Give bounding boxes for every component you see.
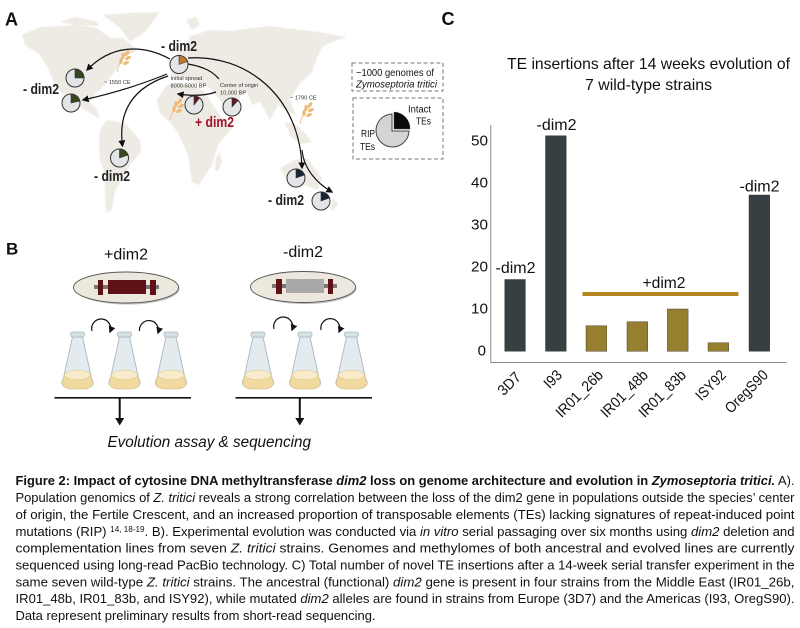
map label: initial spread: Initial spread — [170, 76, 202, 82]
annotation: 3D7 dim2: -dim2 — [496, 260, 536, 277]
label: plus dim2: +dim2 — [104, 246, 148, 264]
map label: center of origin: Center of origin — [220, 83, 258, 89]
legend: TE pie box — [353, 98, 443, 159]
map label: 1550 CE: ~ 1550 CE — [104, 80, 131, 86]
figure caption: of origin, the Fertile Crescent, and an increased proportion of transposable elements (TEs) lacking signatures of repeat-induced point — [16, 507, 795, 522]
x axis labels — [494, 367, 772, 421]
icon: wheat — [170, 97, 185, 120]
pie: Australia — [287, 169, 305, 187]
map label: initial spread: 8000-5000 BP — [170, 84, 207, 90]
curved transfer arrows — [92, 317, 340, 333]
icon: wheat — [117, 49, 132, 72]
figure caption: Population genomics of Z. tritici reveals a strong correlation between the loss of the dim2 gene in populations outside the species’ center — [16, 490, 795, 505]
y axis labels: 10 — [471, 300, 488, 318]
x axis labels: IR01_26b — [552, 367, 607, 421]
figure caption: . B). Experimental evolution was conducted via — [145, 524, 420, 539]
y axis labels: 30 — [471, 216, 488, 234]
bracket: minus dim2 — [236, 397, 372, 426]
y axis labels: 40 — [471, 174, 488, 192]
x axis labels: I93 — [540, 367, 566, 392]
plasmid: functional dim2 — [74, 272, 180, 304]
flasks: plus dim2 series — [62, 332, 187, 389]
arrow: to Africa — [178, 92, 216, 95]
figure caption — [16, 473, 795, 623]
annotation: I93 dim2: -dim2 — [536, 117, 576, 134]
figure caption: IR01_48b, IR01_83b, and ISY92), while mutated dim2 alleles are found in strains from Europe (3D7) and the Americas (I93, OregS90). — [16, 591, 795, 606]
icon: wheat — [300, 101, 315, 124]
figure caption: in vitro serial passaging over six months using dim2 deletion and — [420, 524, 793, 539]
map label: Oceania dim2: - dim2 — [268, 193, 304, 209]
x axis labels: 3D7 — [494, 369, 525, 399]
plasmid: deleted dim2 — [250, 272, 356, 304]
label: evolution assay: Evolution assay & sequencing — [108, 434, 311, 451]
panel: B evolution assay — [6, 240, 372, 451]
map label: South America dim2: - dim2 — [94, 169, 130, 185]
axes — [491, 125, 786, 362]
arrow: to Australia — [188, 58, 302, 168]
figure caption: same seven wild-type Z. tritici strains. The ancestral (functional) dim2 gene is present in four strains from the Middle East (IR01_26b, — [16, 574, 794, 590]
arrow: to South America — [122, 76, 168, 146]
pie: Africa — [185, 96, 203, 114]
legend: TE pie box: RIP — [361, 129, 375, 140]
arrow: to Central America — [83, 74, 167, 100]
heading: panel B: B — [6, 240, 18, 258]
heading: panel C: C — [442, 9, 454, 29]
legend: genomes box — [352, 63, 443, 91]
world map — [22, 12, 347, 213]
legend: TE pie box: TEs — [416, 116, 431, 128]
map label: 1790 CE: ~ 1790 CE — [290, 96, 317, 102]
panel: A world map with dim2 spread — [5, 10, 443, 213]
x axis labels: OregS90 — [722, 367, 772, 417]
x axis labels: ISY92 — [692, 367, 730, 404]
flasks: minus dim2 series — [242, 332, 367, 389]
annotation: plus dim2 group — [582, 275, 738, 296]
figure caption: sequenced using long-read PacBio technology. C) Total number of novel TE insertions after a 14-week serial transfer experiment in the — [16, 558, 794, 572]
pie: North America — [66, 69, 84, 87]
arrow: to New Zealand — [302, 150, 332, 192]
legend: TE pie box: Intact — [408, 104, 431, 116]
figure caption: Figure 2: Impact of cytosine DNA methyltransferase dim2 loss on genome architecture and evolution in Zymoseptoria tritici. A). — [16, 473, 794, 488]
panel: C bar chart — [442, 9, 791, 421]
chart title line 2: 7 wild-type strains — [585, 77, 712, 94]
x axis labels: IR01_83b — [635, 367, 690, 421]
arrow: to North America — [87, 49, 170, 70]
pie: initial spread — [170, 55, 188, 74]
figure caption: 14, 18-19 — [110, 525, 145, 534]
bracket: plus dim2 — [54, 397, 191, 426]
label: minus dim2: -dim2 — [283, 244, 323, 261]
bars — [505, 136, 770, 351]
heading: panel A: A — [5, 10, 18, 30]
pie: center of origin — [223, 98, 241, 116]
map label: plus dim2: + dim2 — [195, 115, 234, 131]
y axis labels — [471, 132, 488, 360]
chart title: TE insertions after 14 weeks evolution of — [507, 56, 791, 73]
figure caption: complementation lines from seven Z. tritici strains. Genomes and methylomes of both ancestral and evolved lines are currently — [16, 540, 795, 556]
pie: Central America — [62, 94, 80, 112]
pie: New Zealand — [312, 192, 330, 210]
y axis labels: 0 — [478, 342, 486, 360]
x axis labels: IR01_48b — [597, 367, 652, 421]
figure caption: mutations (RIP) — [16, 524, 105, 539]
map label: top dim2: - dim2 — [161, 39, 197, 55]
annotation: OregS90 dim2: -dim2 — [740, 178, 780, 196]
map label: North America dim2: - dim2 — [23, 82, 59, 98]
legend: genomes box: Zymoseptoria tritici — [355, 78, 438, 90]
arrow: fertile crescent link — [188, 64, 219, 79]
y axis labels: 50 — [471, 132, 488, 150]
y axis labels: 20 — [471, 258, 488, 276]
legend: TE pie box: TEs — [360, 142, 375, 153]
annotation: plus dim2 group: +dim2 — [642, 275, 686, 292]
legend: genomes box: ~1000 genomes of — [356, 67, 434, 79]
figure caption: Data represent preliminary results from short-read sequencing. — [16, 608, 376, 623]
pie: South America — [110, 149, 128, 167]
map label: center of origin: 10,000 BP — [220, 90, 246, 96]
